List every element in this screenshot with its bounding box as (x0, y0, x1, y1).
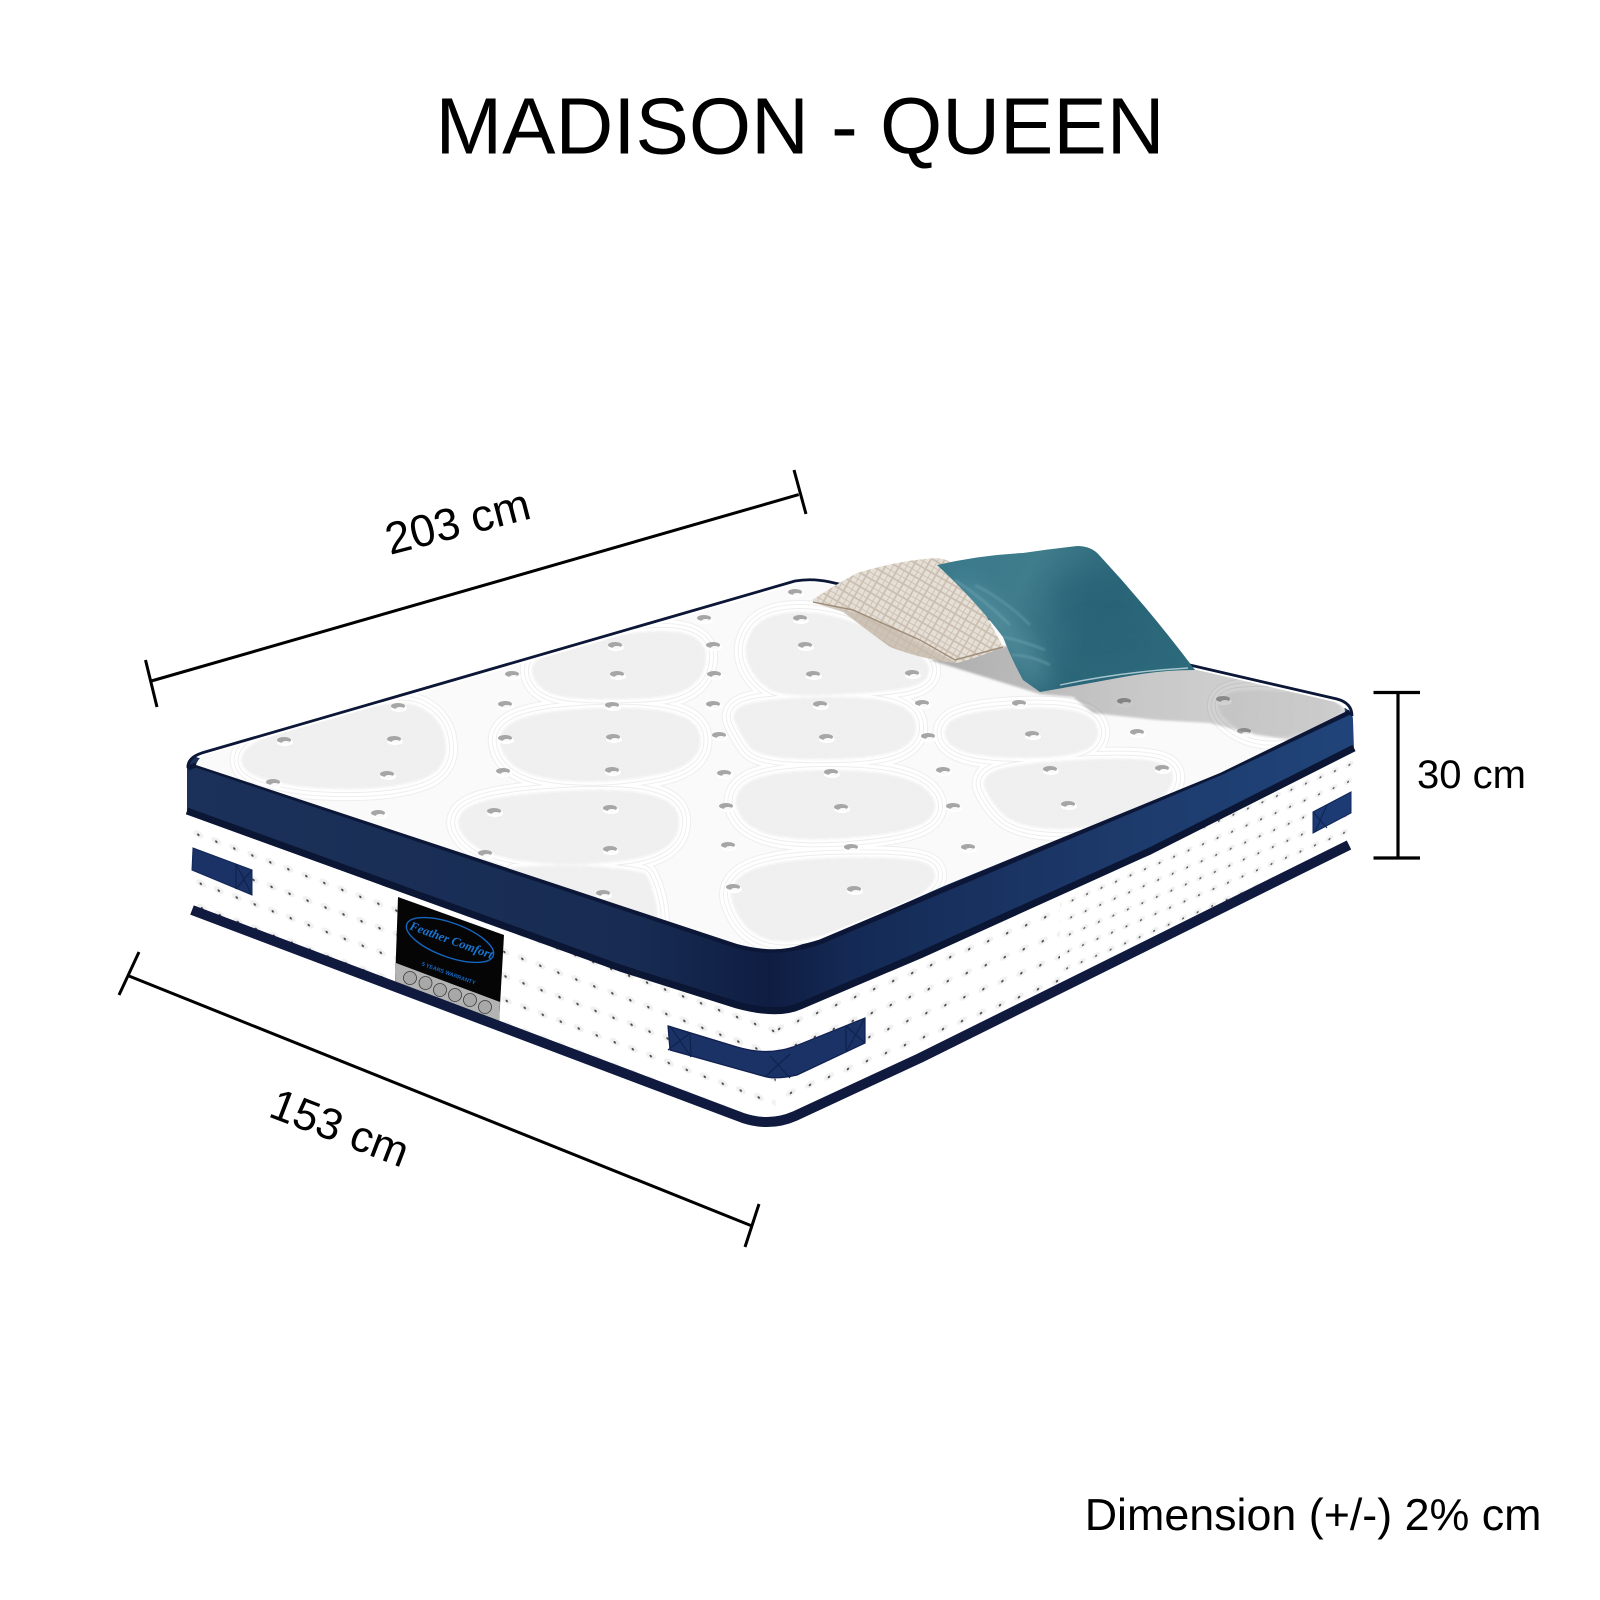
dimension: length 203 cm: 203 cm (380, 478, 535, 565)
quilted swirl bands (250, 620, 1333, 934)
dimension: height 30 cm (1374, 691, 1526, 858)
band seam piping (187, 748, 1354, 1011)
mesh panels (250, 620, 1333, 934)
brand label: 5 YEARS WARRANTY (421, 962, 476, 987)
handle: left side (192, 848, 252, 895)
mattress lower body with pocket quilting (190, 750, 1355, 1130)
pillow shadow on surface (930, 640, 1350, 740)
button tufts (266, 589, 1253, 899)
top edge piping (188, 580, 1352, 768)
dimension: width 153 cm (119, 952, 759, 1247)
pillow: beige lattice (812, 558, 1003, 663)
mattress (180, 546, 1360, 1130)
brand label (395, 897, 504, 1023)
label icons (404, 972, 492, 1014)
handle: right end (1313, 792, 1351, 833)
dimension: width 153 cm: 153 cm (263, 1080, 416, 1177)
dimension: length 203 cm (146, 470, 806, 707)
mattress top surface (196, 589, 1346, 950)
handle: front right (668, 1018, 865, 1078)
footnote: Dimension (+/-) 2% cm (1085, 1490, 1542, 1540)
upper pillow-top navy band (187, 580, 1354, 1011)
bottom piping (192, 845, 1349, 1122)
pillow: teal velvet (937, 546, 1195, 692)
dimension: height 30 cm: 30 cm (1417, 753, 1526, 797)
brand label: Feather Comfort (407, 918, 495, 962)
title: MADISON - QUEEN (436, 82, 1164, 170)
